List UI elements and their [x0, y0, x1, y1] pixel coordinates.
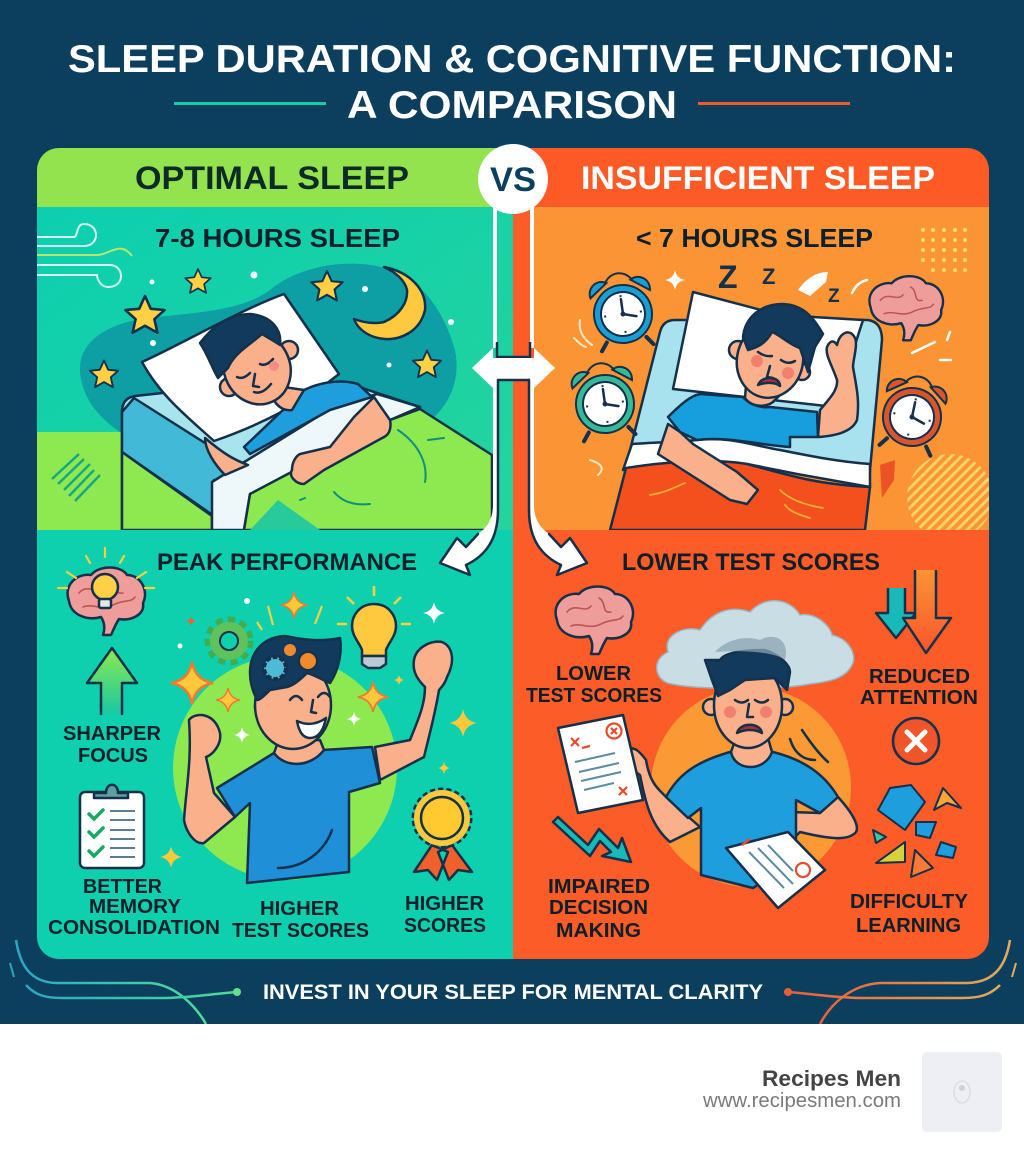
icon: gear: [208, 620, 250, 662]
impaired decision label: MAKING: [556, 920, 641, 942]
higher scores label: [404, 896, 486, 932]
icon: cloud: [657, 601, 854, 688]
hatched circle: [907, 454, 989, 530]
higher test scores label: HIGHER: [260, 898, 340, 920]
title: A COMPARISON: [347, 84, 677, 127]
icon: failed paper left: [558, 715, 643, 813]
panel: lower test scores: [513, 530, 989, 959]
reduced attention label: [860, 666, 978, 709]
sleep zzz: Z: [718, 259, 738, 295]
difficulty learning label: [850, 891, 969, 937]
left down arrow: [440, 380, 498, 575]
person: sleeping: [200, 314, 391, 484]
lower test scores label: [526, 663, 662, 707]
double arrow: [472, 348, 555, 388]
higher scores label: SCORES: [404, 915, 486, 937]
reduced attention label: ATTENTION: [860, 687, 978, 709]
icon: down arrows: [876, 570, 951, 653]
stars: [90, 269, 454, 387]
comparison panels: [37, 148, 993, 959]
hours label: < 7 HOURS SLEEP: [636, 223, 873, 253]
icon: medal: [414, 790, 472, 880]
panel: optimal sleep scene: [37, 148, 513, 530]
icon: brain with bulb: [58, 548, 154, 635]
person: tired in bed: [658, 304, 858, 504]
difficulty learning label: DIFFICULTY: [850, 891, 969, 913]
person: happy: [184, 636, 452, 883]
header labels: INSUFFICIENT SLEEP: [581, 160, 935, 196]
heading: PEAK PERFORMANCE: [157, 549, 417, 576]
sharper focus label: [64, 726, 160, 762]
sharper focus label: FOCUS: [78, 745, 148, 767]
green corner block: [37, 432, 127, 530]
alarm clocks: [569, 269, 950, 457]
lower test scores label: LOWER: [556, 663, 632, 685]
sparkles: [160, 592, 477, 868]
dot grid: [921, 228, 967, 272]
impaired decision label: IMPAIRED: [548, 876, 650, 898]
person: tired: [626, 650, 857, 888]
sleep zzz: Z: [828, 286, 840, 307]
icon: checklist: [80, 785, 144, 868]
night cloud: [80, 264, 457, 432]
higher scores label: HIGHER: [405, 893, 485, 915]
bed: [122, 384, 492, 530]
closing message: [10, 940, 1016, 1024]
icon: up arrow: [87, 648, 137, 715]
lower test scores label: TEST SCORES: [526, 685, 662, 707]
icon: logo tile: [922, 1052, 1002, 1132]
vs badge: [478, 144, 548, 214]
higher test scores label: TEST SCORES: [232, 920, 369, 942]
header labels: OPTIMAL SLEEP: [135, 160, 409, 196]
header labels: [135, 160, 935, 196]
title: SLEEP DURATION & COGNITIVE FUNCTION:: [68, 38, 956, 81]
icon: lightbulb: [337, 586, 411, 668]
panel: insufficient sleep scene: [513, 148, 993, 540]
right down arrow: [529, 380, 587, 575]
flow arrows: [440, 207, 587, 575]
heading: LOWER TEST SCORES: [622, 549, 880, 576]
green glow: [173, 656, 397, 880]
icon: x mark: [893, 718, 939, 764]
icon: brain: [556, 586, 633, 654]
icon: descending arrow: [553, 817, 631, 862]
pillow: [673, 292, 863, 407]
footer: [0, 1024, 1024, 1154]
impaired decision label: [548, 876, 650, 942]
closing message: INVEST IN YOUR SLEEP FOR MENTAL CLARITY: [263, 981, 763, 1004]
reduced attention label: REDUCED: [869, 666, 970, 688]
memory label: [48, 879, 219, 934]
vs badge: VS: [490, 161, 536, 199]
moon: [354, 267, 425, 339]
orange glow: [651, 687, 851, 887]
sleep zzz: [574, 259, 951, 498]
wind lines: [37, 224, 121, 287]
cloud over hair: [715, 637, 786, 660]
brain: [869, 276, 943, 340]
hours label: 7-8 HOURS SLEEP: [155, 223, 400, 253]
icon: broken shapes: [873, 785, 961, 877]
pillow: [142, 294, 339, 441]
memory label: BETTER: [83, 876, 163, 898]
higher test scores label: [232, 901, 368, 937]
icon: failed paper right: [726, 832, 825, 908]
sleep zzz: Z: [762, 264, 775, 289]
memory label: MEMORY: [89, 896, 182, 918]
impaired decision label: DECISION: [549, 897, 648, 919]
title: [68, 38, 956, 127]
footer: www.recipesmen.com: [702, 1090, 901, 1112]
footer: Recipes Men: [762, 1066, 901, 1091]
memory label: CONSOLIDATION: [48, 917, 220, 939]
difficulty learning label: LEARNING: [856, 915, 961, 937]
hatch icon: [52, 454, 100, 501]
sharper focus label: SHARPER: [63, 723, 162, 745]
panel: peak performance: [37, 530, 513, 959]
bed: [610, 320, 882, 530]
